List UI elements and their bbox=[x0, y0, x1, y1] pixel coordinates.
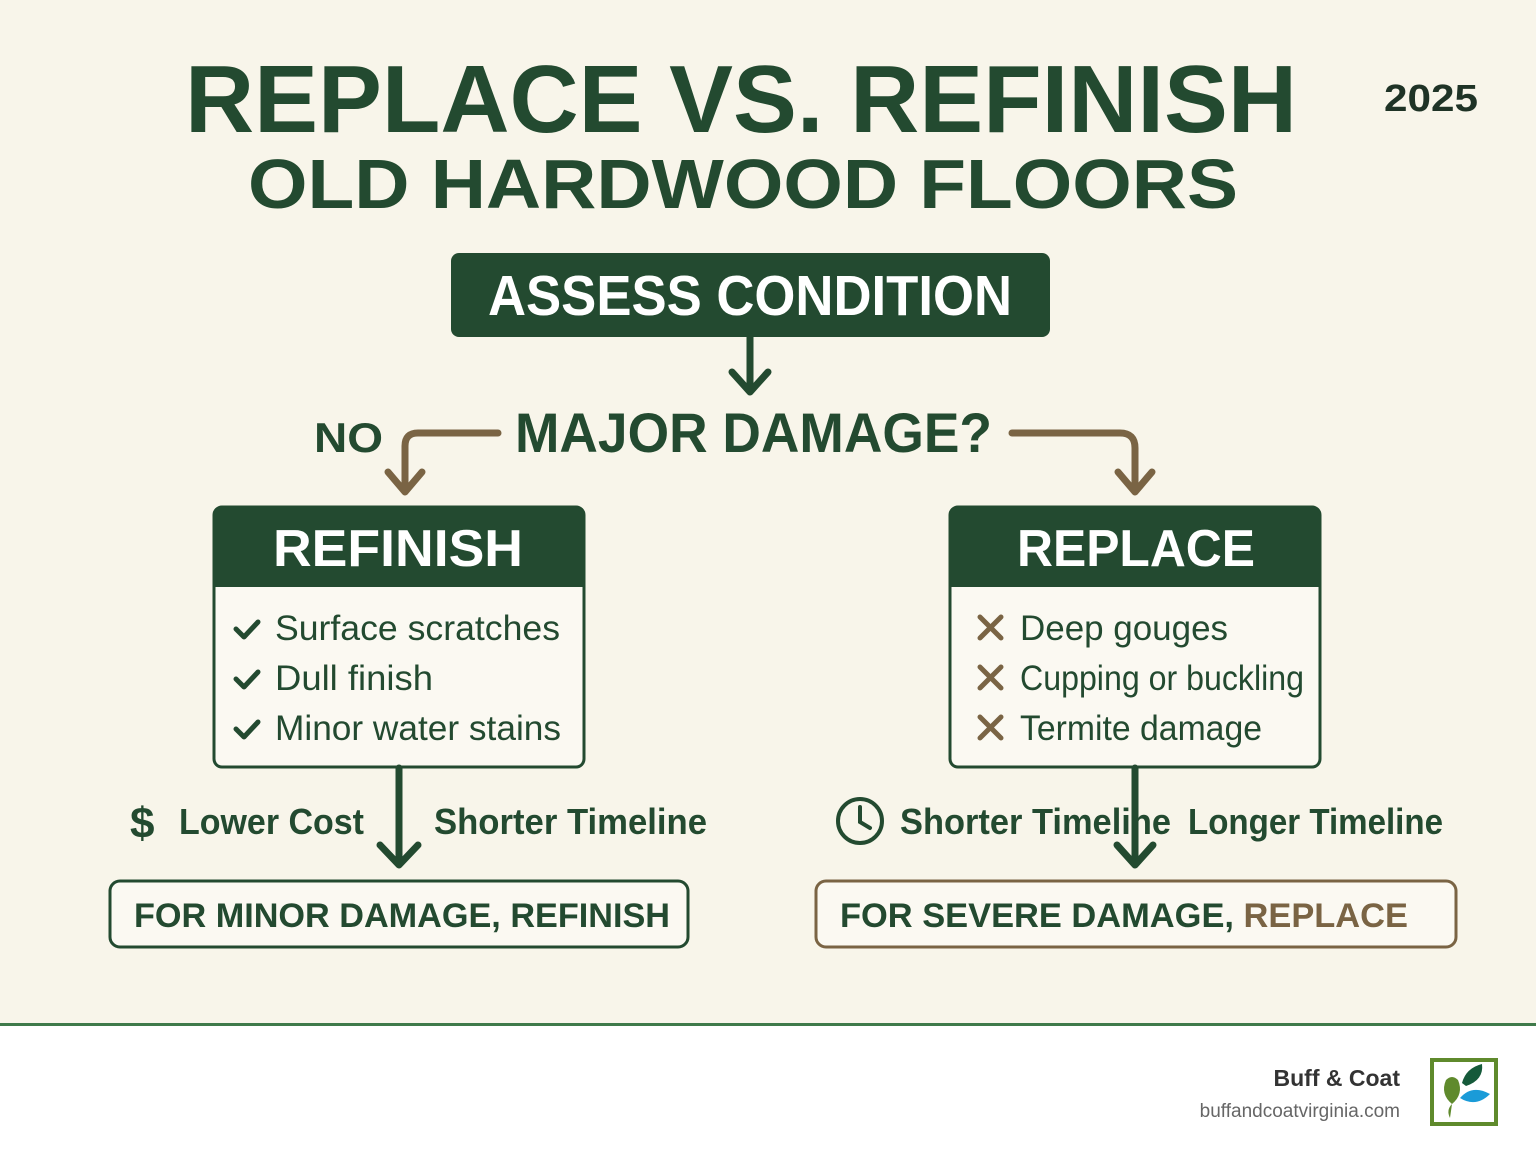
assess condition box: ASSESS CONDITION bbox=[488, 264, 1012, 328]
panel: replace bbox=[950, 507, 1320, 767]
label: no: NO bbox=[314, 414, 383, 461]
outcome: replace: FOR SEVERE DAMAGE, REPLACE bbox=[840, 897, 1408, 935]
refinish list: Surface scratches bbox=[275, 609, 560, 648]
panel: replace: REPLACE bbox=[1017, 520, 1255, 578]
replace timelines: Longer Timeline bbox=[1188, 801, 1443, 842]
arrow: no to refinish bbox=[388, 433, 498, 492]
refinish list: Dull finish bbox=[275, 659, 433, 698]
title: OLD HARDWOOD FLOORS bbox=[248, 145, 1238, 223]
replace list: Termite damage bbox=[1020, 709, 1262, 748]
outcome: refinish: FOR MINOR DAMAGE, REFINISH bbox=[134, 897, 670, 935]
title bbox=[185, 46, 1297, 223]
outcome: refinish bbox=[110, 881, 688, 947]
replace list bbox=[980, 609, 1304, 748]
arrow: down to question bbox=[732, 337, 768, 392]
arrow: yes to replace bbox=[1012, 433, 1152, 492]
icon: dollar: $ bbox=[130, 799, 154, 848]
icon: logo bbox=[1432, 1060, 1496, 1124]
refinish list: Minor water stains bbox=[275, 709, 561, 748]
icon: clock bbox=[838, 799, 882, 843]
arrow: refinish to outcome bbox=[380, 768, 418, 865]
replace timelines: Shorter Timeline bbox=[900, 801, 1171, 842]
replace list: Deep gouges bbox=[1020, 609, 1228, 648]
question: major damage: MAJOR DAMAGE? bbox=[515, 401, 992, 464]
outcome: replace bbox=[816, 881, 1456, 947]
panel: refinish: REFINISH bbox=[273, 520, 523, 578]
arrow: replace to outcome bbox=[1117, 768, 1153, 865]
refinish benefits bbox=[130, 799, 707, 848]
footer brand: buffandcoatvirginia.com bbox=[1200, 1101, 1400, 1122]
refinish benefits: Shorter Timeline bbox=[434, 801, 707, 842]
footer brand: Buff & Coat bbox=[1274, 1065, 1400, 1091]
replace timelines bbox=[838, 799, 1443, 843]
refinish benefits: Lower Cost bbox=[179, 801, 364, 842]
year label: 2025 bbox=[1384, 78, 1478, 120]
replace list: Cupping or buckling bbox=[1020, 659, 1304, 698]
refinish list bbox=[236, 609, 561, 748]
title: REPLACE VS. REFINISH bbox=[185, 46, 1297, 153]
footer brand bbox=[1200, 1065, 1400, 1122]
panel: refinish bbox=[214, 507, 584, 767]
